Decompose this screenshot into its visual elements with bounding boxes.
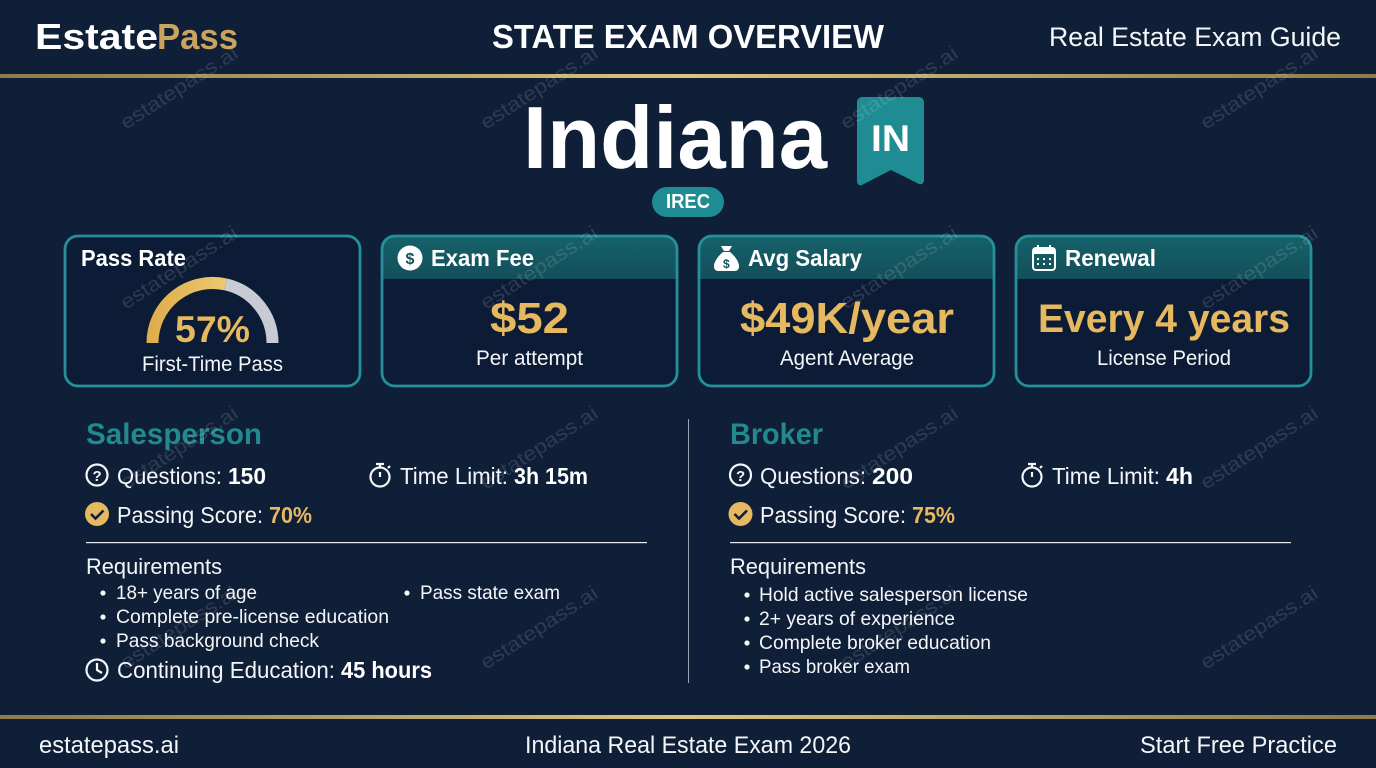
watermarks: estatepass.ai [477,222,602,314]
continuing education [86,657,432,683]
footer: site: estatepass.ai [39,732,179,759]
panel: exam fee: $52 [490,294,569,343]
questions stat: 150 [228,463,266,489]
panel: pass rate: First-Time Pass [142,353,283,376]
requirements list: Complete pre-license education [116,606,389,628]
watermarks: estatepass.ai [1197,222,1322,314]
header: title: STATE EXAM OVERVIEW [492,18,885,55]
panel: average salary: Agent Average [780,347,914,370]
panel: pass rate: Pass Rate [81,245,186,271]
time limit stat [1022,463,1193,489]
panel: pass rate [65,236,360,386]
watermarks: estatepass.ai [477,42,602,134]
questions stat: Questions: [117,463,222,489]
questions stat: 200 [872,463,913,489]
footer: center caption: Indiana Real Estate Exam 2026 [525,732,851,759]
watermarks: estatepass.ai [837,222,962,314]
watermarks: estatepass.ai [837,402,962,494]
commission pill [652,187,724,217]
questions stat: ? [92,468,102,485]
watermarks [117,42,1322,674]
time limit stat: Time Limit: [1052,463,1160,489]
questions stat: Questions: [760,463,866,489]
state name: Indiana [523,88,828,187]
header: logo [35,16,238,57]
requirements list: Complete broker education [759,632,991,654]
time limit stat: Time Limit: [400,463,508,489]
requirements list: 18+ years of age [116,582,257,604]
continuing education: 45 hours [341,657,432,683]
time limit stat [370,463,588,489]
requirements list: Hold active salesperson license [759,584,1028,606]
gauge chart [152,283,273,350]
heading: broker: Broker [730,418,823,451]
requirements list: Pass state exam [420,582,560,604]
watermarks: estatepass.ai [117,222,242,314]
watermarks: estatepass.ai [837,582,962,674]
watermarks: estatepass.ai [117,42,242,134]
panel: salesperson [85,418,647,683]
watermarks: estatepass.ai [1197,42,1322,134]
requirements list: Requirements [730,554,866,579]
requirements list: Requirements [86,554,222,579]
requirements list: 2+ years of experience [759,608,955,630]
watermarks: estatepass.ai [1197,582,1322,674]
panel: exam fee: Exam Fee [431,245,534,271]
requirements list [86,554,560,652]
passing score stat: 75% [912,502,955,528]
passing score stat [728,502,955,528]
panel: exam fee [381,235,678,386]
passing score stat: Passing Score: [117,502,263,528]
gauge chart: 57% [175,309,250,350]
panel: average salary [698,235,995,386]
panel: renewal: Renewal [1065,245,1156,271]
panel: broker [728,418,1291,678]
icon: money bag [714,246,739,271]
requirements list: Pass broker exam [759,656,910,678]
icon: state bookmark badge: IN [871,118,910,159]
panel: average salary: Avg Salary [748,245,862,271]
panel: renewal: License Period [1097,347,1231,370]
requirements list [730,554,1028,678]
header: guide label: Real Estate Exam Guide [1049,22,1341,52]
panel: renewal: Every 4 years [1038,297,1290,341]
icon: dollar coin [398,246,422,270]
header gold rule [0,74,1376,78]
questions stat [730,463,913,489]
panel: exam fee: Per attempt [476,347,583,370]
icon: money bag: $ [723,257,730,271]
footer: call to action: Start Free Practice [1140,732,1337,759]
requirements list: Pass background check [116,630,319,652]
heading: salesperson: Salesperson [86,418,262,451]
time limit stat: 3h 15m [514,463,588,489]
watermarks: estatepass.ai [477,402,602,494]
panel: average salary: $49K/year [740,294,954,343]
passing score stat [85,502,312,528]
header: logo: Estate [35,16,158,57]
icon: calendar [1033,245,1055,270]
questions stat: ? [736,468,745,485]
passing score stat: Passing Score: [760,502,906,528]
watermarks: estatepass.ai [1197,402,1322,494]
questions stat [86,463,266,489]
time limit stat: 4h [1166,463,1193,489]
watermarks: estatepass.ai [837,42,962,134]
watermarks: estatepass.ai [117,402,242,494]
header: logo: Pass [157,16,238,57]
commission pill: IREC [666,191,710,213]
icon: dollar coin: $ [406,251,414,268]
watermarks: estatepass.ai [477,582,602,674]
panel: renewal [1015,235,1312,386]
watermarks: estatepass.ai [117,582,242,674]
icon: state bookmark badge [857,97,924,185]
continuing education: Continuing Education: [117,657,335,683]
passing score stat: 70% [269,502,312,528]
